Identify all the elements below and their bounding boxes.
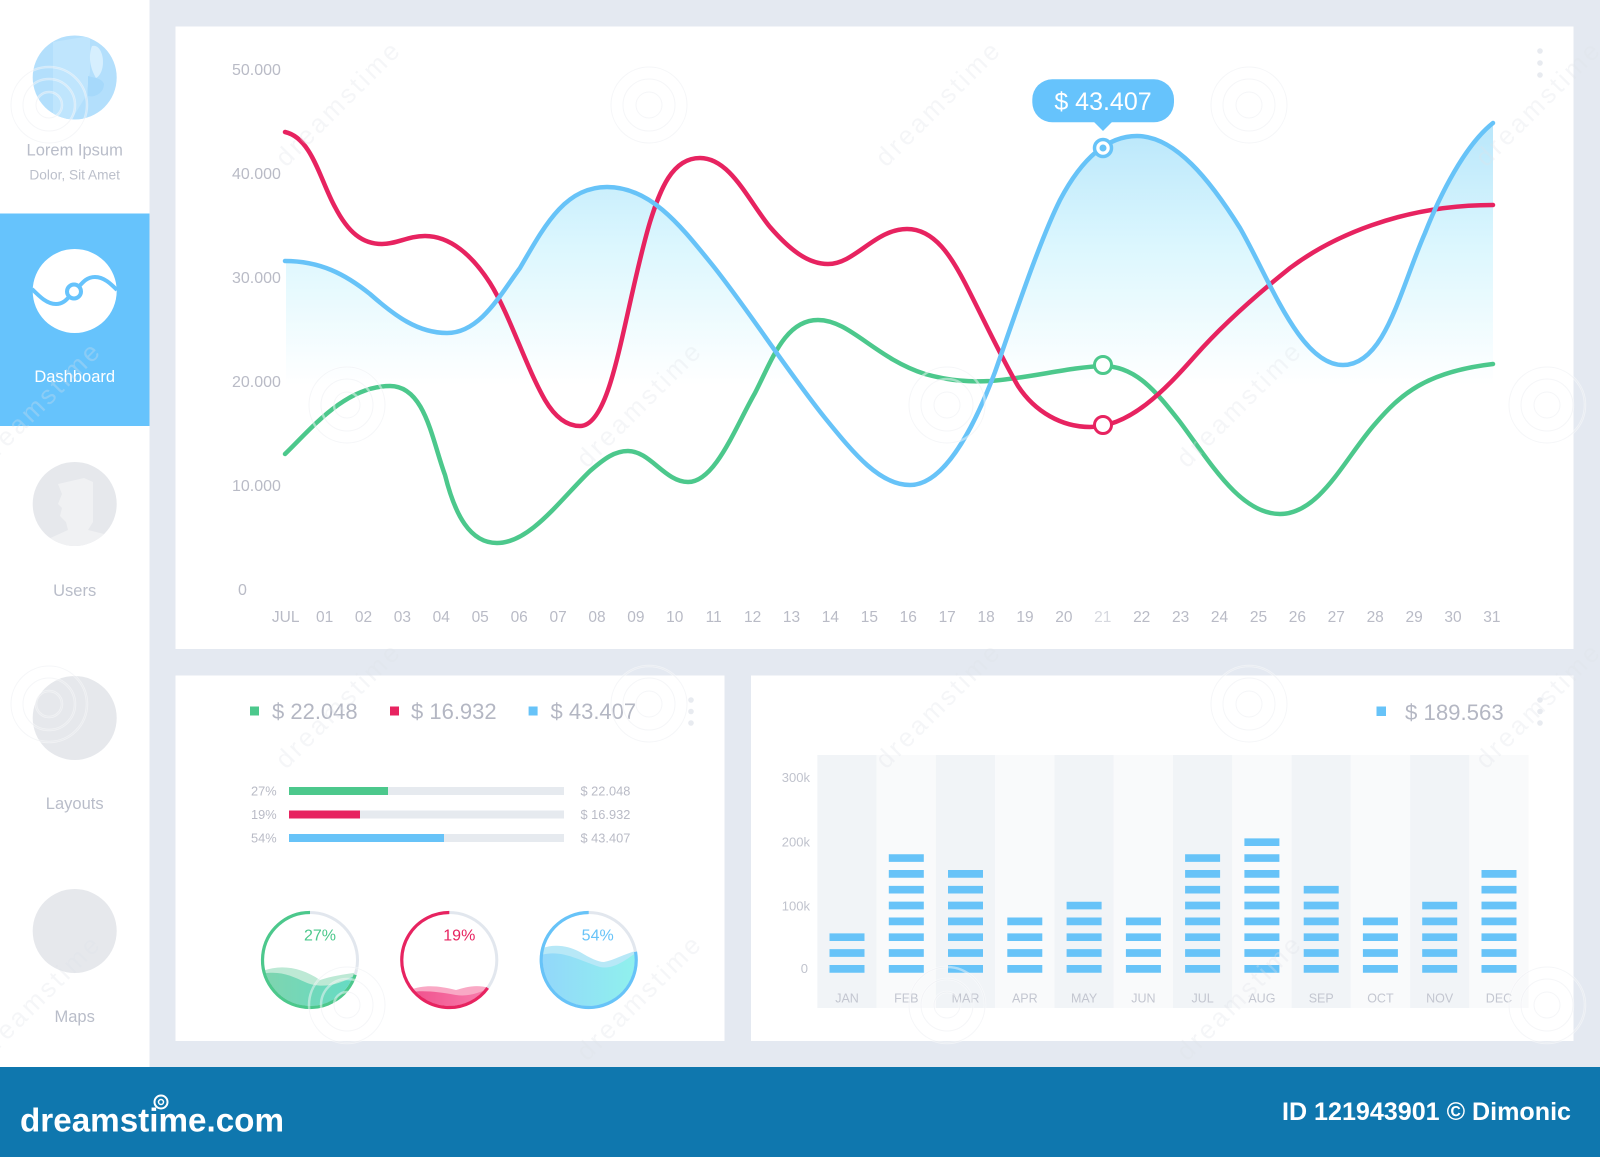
panel: totals and progress (176, 676, 724, 1041)
progress bars: 27% (251, 784, 277, 798)
callout: selected value: $ 43.407 (1054, 88, 1152, 116)
nav item: maps: Maps (55, 1008, 95, 1026)
segmented bars (847, 838, 1499, 973)
nav item: layouts: Layouts (46, 795, 104, 813)
watermark overlay: dreamstime (570, 928, 709, 1066)
x axis labels: 13 (783, 609, 800, 626)
x axis labels: 02 (355, 609, 372, 626)
menu dots (1537, 48, 1543, 78)
progress bars (251, 784, 630, 846)
panel: sidebar (0, 0, 150, 1067)
x axis labels: 21 (1094, 609, 1111, 626)
legend: totals: $ 43.407 (550, 699, 636, 724)
month labels: JAN (835, 992, 859, 1006)
x axis labels: 12 (744, 609, 761, 626)
y axis labels: 20.000 (232, 374, 281, 391)
progress bars: $ 43.407 (580, 830, 630, 846)
nav item: dashboard (active): Dashboard (34, 368, 115, 386)
icon: dashboard (32, 249, 117, 333)
month labels: JUN (1131, 992, 1156, 1006)
y axis labels (232, 62, 281, 599)
month labels: NOV (1426, 992, 1454, 1006)
nav item: profile (27, 36, 123, 182)
menu dots (688, 697, 694, 726)
marker: red point (1094, 416, 1112, 434)
month labels: MAY (1071, 992, 1098, 1006)
y axis labels: 10.000 (232, 478, 281, 495)
month labels: DEC (1486, 992, 1512, 1006)
icon: layouts circle (33, 676, 117, 760)
gauge: green 27%: 27% (304, 928, 336, 944)
panel: monthly bar chart (751, 676, 1574, 1041)
x axis labels: 27 (1328, 609, 1345, 626)
x axis labels (272, 609, 1501, 626)
x axis labels: 07 (549, 609, 567, 626)
legend: monthly total: $ 189.563 (1405, 700, 1504, 725)
watermark overlay: dreamstime (869, 636, 1008, 774)
y axis labels: 30.000 (232, 270, 281, 287)
gauge: red 19% (402, 912, 497, 1012)
icon: maps circle (33, 889, 117, 973)
watermark overlay: dreamstime (269, 636, 408, 774)
x axis labels: 04 (433, 609, 450, 626)
footer bar: ID 121943901 © Dimonic (1282, 1098, 1571, 1126)
callout: selected value (1032, 79, 1174, 131)
nav item: users: Users (53, 582, 96, 600)
gauge: green 27% (260, 912, 360, 1012)
x axis labels: 16 (900, 609, 917, 626)
nav item: maps (33, 889, 117, 1026)
watermark overlay: dreamstime (1170, 335, 1309, 473)
panel: line chart (176, 26, 1574, 649)
gauge: blue 54%: 54% (582, 928, 614, 944)
y axis labels: 40.000 (232, 166, 281, 183)
x axis labels: 30 (1444, 609, 1462, 626)
bar chart y axis labels (782, 770, 810, 976)
x axis labels: 26 (1289, 609, 1306, 626)
gauge: blue 54% (538, 912, 640, 1012)
x axis labels: 28 (1367, 609, 1384, 626)
bar chart y axis labels: 100k (782, 898, 810, 914)
x axis labels: 29 (1405, 609, 1423, 626)
column stripes (817, 755, 1529, 1008)
progress bars: $ 22.048 (580, 784, 630, 798)
month labels: SEP (1309, 992, 1334, 1006)
x axis labels: 08 (588, 609, 606, 626)
series: green line (285, 320, 1493, 543)
x axis labels: 18 (977, 609, 995, 626)
y axis labels: 50.000 (232, 62, 281, 79)
x axis labels: 15 (861, 609, 878, 626)
progress bars: 54% (251, 830, 277, 846)
month labels: FEB (894, 992, 918, 1006)
legend: totals: $ 22.048 (272, 699, 358, 724)
watermark overlay: dreamstime (1170, 928, 1309, 1066)
x axis labels: 14 (822, 609, 839, 626)
x axis labels: 25 (1250, 609, 1267, 626)
x axis labels: 10 (666, 609, 684, 626)
month labels: APR (1012, 992, 1038, 1006)
y axis labels: 0 (238, 582, 247, 599)
marker: blue point (1094, 140, 1112, 156)
bar chart y axis labels: 200k (782, 834, 810, 850)
nav item: profile: Dolor, Sit Amet (29, 168, 120, 182)
x axis labels: 24 (1211, 609, 1228, 626)
icon: profile avatar (33, 36, 117, 122)
legend: totals (250, 699, 636, 724)
footer logo: dreamstime.com (20, 1102, 284, 1138)
x axis labels: 06 (511, 609, 528, 626)
x axis labels: 17 (939, 609, 956, 626)
nav item: layouts (33, 676, 117, 813)
month labels: OCT (1367, 992, 1394, 1006)
series: blue line (285, 123, 1493, 485)
month labels: AUG (1248, 992, 1275, 1006)
watermark overlay: dreamstime (269, 34, 408, 172)
x axis labels: JUL (272, 609, 300, 626)
icon: user silhouette (30, 462, 117, 552)
legend: totals: $ 16.932 (411, 699, 497, 724)
progress bars: $ 16.932 (580, 807, 630, 822)
x axis labels: 01 (316, 609, 333, 626)
x axis labels: 19 (1016, 609, 1034, 626)
month labels: JUL (1191, 992, 1214, 1006)
x axis labels: 03 (394, 609, 411, 626)
menu dots (1537, 697, 1543, 726)
footer bar (0, 1067, 1600, 1157)
series: red line (285, 132, 1493, 427)
x axis labels: 23 (1172, 609, 1189, 626)
nav item: dashboard (active) (0, 214, 150, 426)
x axis labels: 31 (1483, 609, 1501, 626)
x axis labels: 20 (1055, 609, 1073, 626)
x axis labels: 05 (472, 609, 489, 626)
month labels: MAR (952, 992, 979, 1006)
gauge: red 19%: 19% (443, 928, 475, 944)
nav item: profile: Lorem Ipsum (27, 142, 123, 160)
x axis labels: 09 (627, 609, 645, 626)
progress bars: 19% (251, 807, 277, 822)
watermark overlay: dreamstime (570, 335, 709, 473)
x axis labels: 11 (706, 609, 722, 626)
month labels (835, 992, 1512, 1006)
x axis labels: 22 (1133, 609, 1150, 626)
marker: green point (1094, 356, 1112, 374)
bar chart y axis labels: 300k (782, 770, 810, 785)
area under blue series (286, 123, 1493, 485)
nav item: users (30, 462, 117, 600)
watermark overlay: dreamstime (869, 34, 1008, 172)
bar chart y axis labels: 0 (801, 961, 808, 976)
